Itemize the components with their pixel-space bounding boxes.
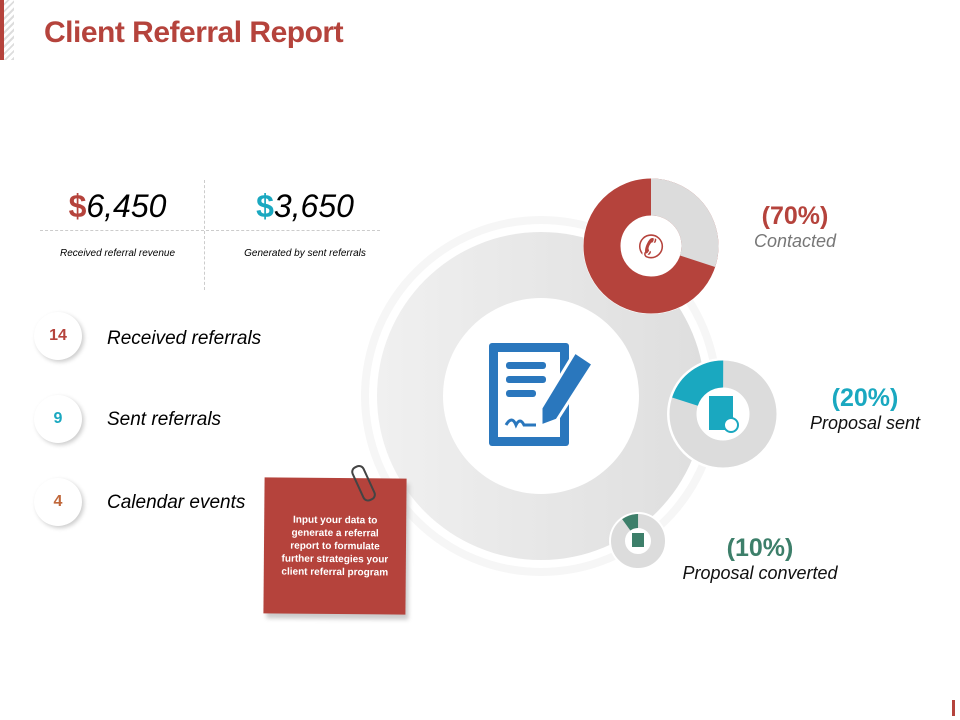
list: received referrals: Received referrals [107, 328, 261, 349]
list: calendar events: Calendar events [107, 492, 245, 513]
label: proposal sent: (20%) [832, 384, 898, 412]
callout: sticky note: generate a referral [291, 528, 379, 539]
list: received referrals [34, 312, 261, 364]
donut: contacted 70%: ✆ [638, 229, 664, 265]
label: contacted: (70%) [762, 202, 828, 230]
callout: sticky note [263, 477, 407, 615]
title: Client Referral Report [44, 16, 343, 49]
label: contacted [754, 202, 836, 251]
icon: paperclip [349, 463, 378, 503]
list: calendar events: 4 [54, 493, 62, 510]
label: proposal converted [682, 534, 838, 583]
stat: received revenue: $6,450 [69, 188, 166, 224]
list: received referrals: 14 [49, 327, 67, 344]
label: received revenue: Received referral revenue [60, 248, 175, 259]
label: proposal converted: (10%) [727, 534, 793, 562]
label: generated revenue: Generated by sent referrals [244, 248, 366, 259]
callout: sticky note: Input your data to [293, 515, 377, 526]
label: proposal sent: Proposal sent [810, 413, 920, 433]
stats panel: revenue [40, 180, 380, 290]
stat: generated revenue: $3,650 [256, 188, 354, 224]
callout: sticky note: client referral program [281, 567, 388, 578]
donut: contacted 70% [583, 178, 719, 314]
big ring [361, 216, 721, 576]
title accent bar [0, 0, 14, 60]
callout: sticky note: further strategies your [281, 554, 388, 565]
donut: proposal sent 20% [667, 358, 779, 470]
donut: proposal converted 10% [609, 512, 667, 570]
icon: document with pen [489, 343, 593, 446]
list: calendar events [34, 478, 245, 530]
list: sent referrals: Sent referrals [107, 409, 221, 430]
list: sent referrals: 9 [54, 410, 62, 427]
list: sent referrals [34, 395, 221, 447]
label: contacted: Contacted [754, 231, 836, 251]
callout: sticky note: report to formulate [290, 541, 380, 552]
label: proposal converted: Proposal converted [682, 563, 838, 583]
label: proposal sent [810, 384, 921, 433]
